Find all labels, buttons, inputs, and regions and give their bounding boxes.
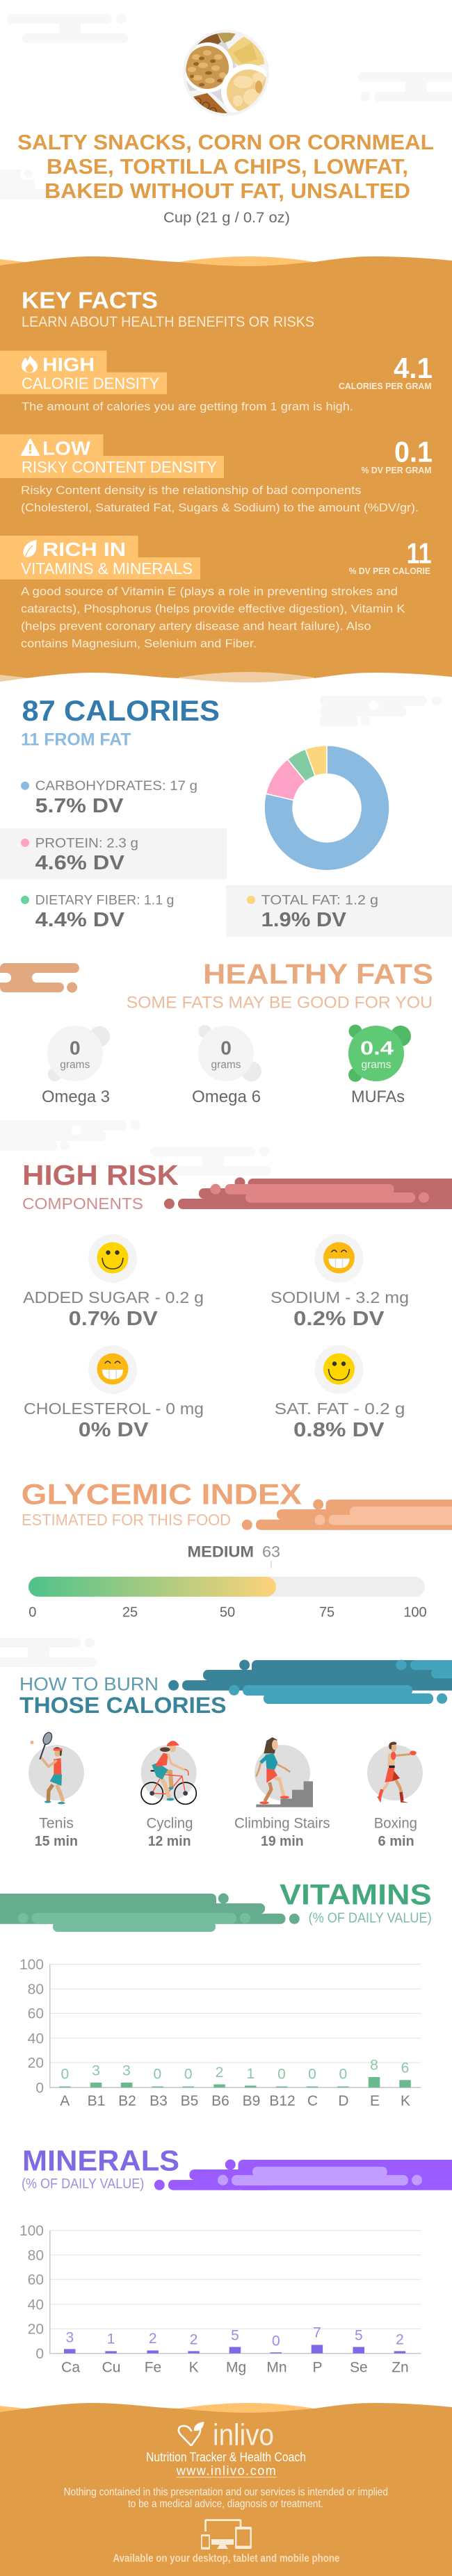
category labels: E xyxy=(370,2093,380,2109)
legend: protein: 4.6% DV xyxy=(35,852,125,874)
logo: inlivo xyxy=(179,2418,274,2452)
y axis labels: 40 xyxy=(28,2297,44,2313)
gauge label: medium 63 xyxy=(188,1543,280,1568)
heading: healthy fats: HEALTHY FATS xyxy=(203,958,433,990)
activity: climbing stairs: Climbing Stairs xyxy=(234,1816,330,1832)
stat: omega 6: 0 xyxy=(220,1037,232,1059)
gauge scale xyxy=(29,1605,427,1621)
bar values xyxy=(60,2057,409,2083)
activity: boxing xyxy=(367,1741,423,1849)
bar values: 1 xyxy=(107,2331,115,2347)
bar values: 7 xyxy=(313,2324,321,2340)
icon: tennis player xyxy=(29,1731,84,1804)
component: saturated fat: SAT. FAT - 0.2 g xyxy=(275,1400,405,1418)
y axis labels: 60 xyxy=(28,2006,44,2022)
heading: 87 calories: 87 CALORIES xyxy=(22,694,220,727)
food photo xyxy=(183,30,269,116)
website: www.inlivo.com xyxy=(176,2464,276,2478)
fact: rich in vitamins and minerals: A good source of Vitamin E (plays a role in preventing strokes and xyxy=(21,585,398,598)
fact: high calorie density xyxy=(0,351,433,413)
bar values: 2 xyxy=(149,2331,157,2347)
component: sodium: SODIUM - 3.2 mg xyxy=(271,1288,409,1306)
bar values: 0 xyxy=(154,2067,161,2083)
subheading: key facts: LEARN ABOUT HEALTH BENEFITS OR RISKS xyxy=(22,314,314,330)
icon: flame xyxy=(22,354,38,372)
legend: dietary fiber: DIETARY FIBER: 1.1 g xyxy=(35,894,174,908)
icon: boxer xyxy=(367,1741,423,1803)
bar values: 0 xyxy=(308,2067,316,2083)
banner: minerals xyxy=(154,2160,452,2190)
activity: cycling: 12 min xyxy=(148,1834,191,1849)
category labels: D xyxy=(338,2093,349,2109)
y axis labels: 80 xyxy=(28,1982,44,1998)
title xyxy=(17,130,434,203)
category labels xyxy=(60,2093,410,2109)
category labels: Mn xyxy=(266,2359,287,2375)
subheading: healthy fats: SOME FATS MAY BE GOOD FOR YOU xyxy=(127,993,433,1012)
bar values: 6 xyxy=(401,2060,409,2076)
serving size: Cup (21 g / 0.7 oz) xyxy=(163,210,290,226)
y axis labels: 100 xyxy=(19,2223,44,2239)
activity: climbing stairs: 19 min xyxy=(261,1834,304,1849)
activity: tennis xyxy=(29,1731,84,1849)
category labels: Mg xyxy=(226,2359,246,2375)
legend: carbohydrates xyxy=(21,779,197,817)
panel: how to burn those calories xyxy=(19,1659,452,1849)
subheading: percent of daily value: (% OF DAILY VALUE) xyxy=(22,2176,144,2192)
category labels: Fe xyxy=(145,2359,161,2375)
heading: glycemic index: GLYCEMIC INDEX xyxy=(22,1477,302,1510)
legend: carbohydrates: 5.7% DV xyxy=(35,795,124,817)
banner: glycemic index xyxy=(242,1500,452,1530)
banner: vitamins xyxy=(0,1893,300,1932)
gauge scale: 100 xyxy=(403,1605,427,1621)
panel: footer xyxy=(0,2403,452,2576)
wave: top of key facts xyxy=(0,256,452,278)
y axis labels: 20 xyxy=(28,2322,44,2338)
fact: rich in vitamins and minerals: (helps prevent coronary artery disease and heart failure). Also xyxy=(21,620,371,632)
icon: grin xyxy=(323,1242,355,1273)
stat: mufas: MUFAs xyxy=(351,1088,405,1106)
bar values: 0 xyxy=(272,2333,280,2349)
stat: omega 6: grams xyxy=(211,1059,241,1071)
gauge label: medium 63: 63 xyxy=(262,1543,280,1561)
legend: dietary fiber xyxy=(21,894,174,931)
stat: mufas: 0.4 xyxy=(360,1037,394,1059)
bar values: 3 xyxy=(65,2330,74,2346)
gauge scale: 50 xyxy=(220,1605,235,1621)
fact: high calorie density: 4.1 xyxy=(394,352,433,384)
fact: rich in vitamins and minerals: 11 xyxy=(407,536,432,569)
category labels: Se xyxy=(350,2359,368,2375)
heading: minerals: MINERALS xyxy=(22,2144,179,2176)
bar values xyxy=(65,2324,404,2349)
fact: rich in vitamins and minerals: cataracts), Phosphorus (helps provide effective digestion), Vitamin K xyxy=(21,602,405,616)
gauge scale: 25 xyxy=(122,1605,138,1621)
fact: high calorie density: CALORIE DENSITY xyxy=(22,375,159,393)
disclaimer: Nothing contained in this presentation and our services is intended or implied xyxy=(64,2486,388,2498)
heading: how to burn: HOW TO BURN xyxy=(19,1673,159,1694)
component: sodium: 0.2% DV xyxy=(293,1308,385,1330)
gauge scale: 0 xyxy=(29,1605,36,1621)
chart: minerals bar chart xyxy=(19,2223,421,2375)
component: added sugar xyxy=(23,1234,204,1330)
panel: key facts xyxy=(0,256,452,692)
icon: smiley xyxy=(97,1242,128,1273)
background cloud: above high risk xyxy=(0,1120,140,1151)
legend: total fat xyxy=(226,885,452,937)
panel: calories xyxy=(0,694,452,937)
legend: protein: PROTEIN: 2.3 g xyxy=(35,836,138,851)
bar values: 5 xyxy=(355,2327,363,2343)
fact: rich in vitamins and minerals: % DV PER CALORIE xyxy=(349,566,430,576)
activity: climbing stairs xyxy=(234,1737,330,1849)
fact: low risky content density: (Cholesterol, Saturated Fat, Sugars & Sodium) to the amount (%DV/gr). xyxy=(21,501,419,514)
panel: vitamins xyxy=(0,1878,432,2109)
bar values: 1 xyxy=(246,2066,255,2082)
icon: leaf xyxy=(23,540,37,557)
heading: high risk: HIGH RISK xyxy=(22,1159,179,1191)
category labels: A xyxy=(60,2093,70,2109)
icon: stair climber xyxy=(255,1737,313,1807)
panel: high risk xyxy=(22,1159,452,1441)
category labels: Cu xyxy=(102,2359,120,2375)
chart: vitamins bar chart xyxy=(19,1957,421,2109)
category labels: P xyxy=(312,2359,323,2375)
legend: total fat: 1.9% DV xyxy=(261,909,347,931)
component: cholesterol: 0% DV xyxy=(79,1419,149,1441)
title: BAKED WITHOUT FAT, UNSALTED xyxy=(45,179,410,203)
background cloud: top right xyxy=(358,72,452,101)
disclaimer: to be a medical advice, diagnosis or treatment. xyxy=(128,2498,323,2510)
category labels: K xyxy=(189,2359,199,2375)
background cloud: burn xyxy=(0,1638,97,1667)
heading: key facts: KEY FACTS xyxy=(22,288,158,313)
bar values: 5 xyxy=(231,2327,239,2343)
y axis labels xyxy=(19,1957,44,2096)
availability note: Available on your desktop, tablet and mobile phone xyxy=(113,2553,339,2565)
activity: boxing: 6 min xyxy=(378,1834,414,1849)
y axis labels: 60 xyxy=(28,2272,44,2288)
bar values: 8 xyxy=(370,2057,378,2073)
fact: high calorie density: CALORIES PER GRAM xyxy=(339,381,432,391)
category labels: K xyxy=(401,2093,410,2109)
icon: heart with leaf xyxy=(179,2422,204,2446)
banner: burn xyxy=(168,1659,452,1704)
category labels: B9 xyxy=(243,2093,260,2109)
logo: inlivo: inlivo xyxy=(213,2418,274,2452)
wave: bottom of key facts xyxy=(0,672,452,692)
fact: rich in vitamins and minerals xyxy=(0,536,432,650)
category labels: B3 xyxy=(150,2093,168,2109)
y axis labels: 40 xyxy=(28,2031,44,2046)
y axis labels: 80 xyxy=(28,2247,44,2263)
bar values: 0 xyxy=(60,2067,69,2083)
activity: cycling: Cycling xyxy=(146,1816,193,1832)
bar values: 2 xyxy=(396,2331,404,2347)
category labels: C xyxy=(307,2093,318,2109)
category labels: B2 xyxy=(118,2093,136,2109)
stat: mufas: grams xyxy=(361,1059,392,1071)
stat: omega 3: Omega 3 xyxy=(42,1088,110,1106)
y axis labels xyxy=(19,2223,44,2362)
icon: warning xyxy=(22,439,39,455)
component: sodium xyxy=(271,1234,409,1330)
gauge scale: 75 xyxy=(319,1605,334,1621)
icon: grin xyxy=(97,1354,128,1384)
gauge label: medium 63: MEDIUM xyxy=(188,1543,254,1561)
fact: rich in vitamins and minerals: VITAMINS & MINERALS xyxy=(21,559,193,577)
background cloud: left of title xyxy=(0,170,90,199)
fact: rich in vitamins and minerals: RICH IN xyxy=(42,539,126,560)
activity: tennis: 15 min xyxy=(35,1834,78,1849)
activity: boxing: Boxing xyxy=(374,1816,417,1832)
panel: minerals xyxy=(19,2144,452,2375)
stat: mufas xyxy=(348,1024,411,1106)
disclaimer xyxy=(64,2486,388,2510)
icon: cyclist xyxy=(141,1741,197,1804)
stat: omega 3 xyxy=(42,1026,110,1106)
category labels: B5 xyxy=(181,2093,198,2109)
banner: high risk xyxy=(164,1177,452,1209)
component: cholesterol xyxy=(24,1345,204,1441)
subheading: 11 from fat: 11 FROM FAT xyxy=(21,730,131,750)
component: saturated fat xyxy=(275,1345,405,1441)
fact: low risky content density: Risky Content density is the relationship of bad components xyxy=(21,484,362,497)
stat: omega 3: 0 xyxy=(70,1037,81,1059)
component: added sugar: ADDED SUGAR - 0.2 g xyxy=(23,1288,204,1306)
chart: macronutrient donut xyxy=(264,746,389,871)
legend: carbohydrates: CARBOHYDRATES: 17 g xyxy=(35,779,197,794)
bar values: 2 xyxy=(216,2065,223,2081)
subheading: estimated: ESTIMATED FOR THIS FOOD xyxy=(22,1511,231,1529)
bar values: 3 xyxy=(92,2063,100,2079)
heading: those calories: THOSE CALORIES xyxy=(19,1693,227,1718)
bar values: 0 xyxy=(339,2067,347,2083)
bar values: 3 xyxy=(122,2063,131,2079)
bar values: 0 xyxy=(277,2067,286,2083)
legend: total fat: TOTAL FAT: 1.2 g xyxy=(261,894,378,908)
category labels: B12 xyxy=(269,2093,296,2109)
category labels: B6 xyxy=(211,2093,229,2109)
legend: protein xyxy=(0,828,227,880)
bars xyxy=(64,2345,405,2354)
icon: devices xyxy=(201,2520,252,2550)
subheading: percent of daily value: (% OF DAILY VALUE) xyxy=(309,1911,432,1926)
y axis labels: 0 xyxy=(35,2081,44,2096)
activity: tennis: Tenis xyxy=(39,1816,74,1832)
bar values: 2 xyxy=(190,2331,197,2347)
fact: low risky content density: LOW xyxy=(42,438,91,459)
category labels: B1 xyxy=(88,2093,105,2109)
y axis labels: 0 xyxy=(35,2346,44,2362)
tagline: Nutrition Tracker & Health Coach xyxy=(146,2450,306,2464)
fact: high calorie density: HIGH xyxy=(42,354,95,375)
legend: dietary fiber: 4.4% DV xyxy=(35,909,125,931)
component: cholesterol: CHOLESTEROL - 0 mg xyxy=(24,1400,204,1418)
fact: low risky content density xyxy=(0,434,433,514)
panel: glycemic index xyxy=(22,1477,452,1621)
title: BASE, TORTILLA CHIPS, LOWFAT, xyxy=(47,154,408,179)
background cloud: right of high risk xyxy=(150,1147,271,1176)
banner: healthy fats xyxy=(0,963,88,992)
wave: footer xyxy=(0,2403,452,2425)
component: saturated fat: 0.8% DV xyxy=(293,1419,385,1441)
fact: low risky content density: % DV PER GRAM xyxy=(362,465,431,475)
background cloud: calories xyxy=(320,696,442,726)
stat: omega 3: grams xyxy=(60,1059,90,1071)
bars xyxy=(59,2077,411,2087)
background cloud: top left xyxy=(7,14,128,43)
y axis labels: 20 xyxy=(28,2056,44,2072)
component: added sugar: 0.7% DV xyxy=(69,1308,158,1330)
subheading: components: COMPONENTS xyxy=(22,1195,143,1213)
title: SALTY SNACKS, CORN OR CORNMEAL xyxy=(17,130,434,154)
stat: omega 6 xyxy=(192,1025,261,1106)
activity: cycling xyxy=(141,1741,197,1849)
fact: low risky content density: RISKY CONTENT DENSITY xyxy=(22,458,217,476)
panel: healthy fats xyxy=(0,958,433,1106)
heading: vitamins: VITAMINS xyxy=(280,1878,432,1911)
gauge bar xyxy=(29,1577,425,1597)
bar values: 0 xyxy=(184,2067,193,2083)
category labels: Zn xyxy=(392,2359,409,2375)
y axis labels: 100 xyxy=(19,1957,44,1973)
fact: rich in vitamins and minerals: contains Magnesium, Selenium and Fiber. xyxy=(21,637,257,650)
fact: high calorie density: The amount of calories you are getting from 1 gram is high. xyxy=(22,400,353,413)
category labels: Ca xyxy=(61,2359,80,2375)
category labels xyxy=(61,2359,409,2375)
icon: smiley xyxy=(323,1354,355,1384)
stat: omega 6: Omega 6 xyxy=(192,1088,261,1106)
fact: low risky content density: 0.1 xyxy=(394,436,433,468)
